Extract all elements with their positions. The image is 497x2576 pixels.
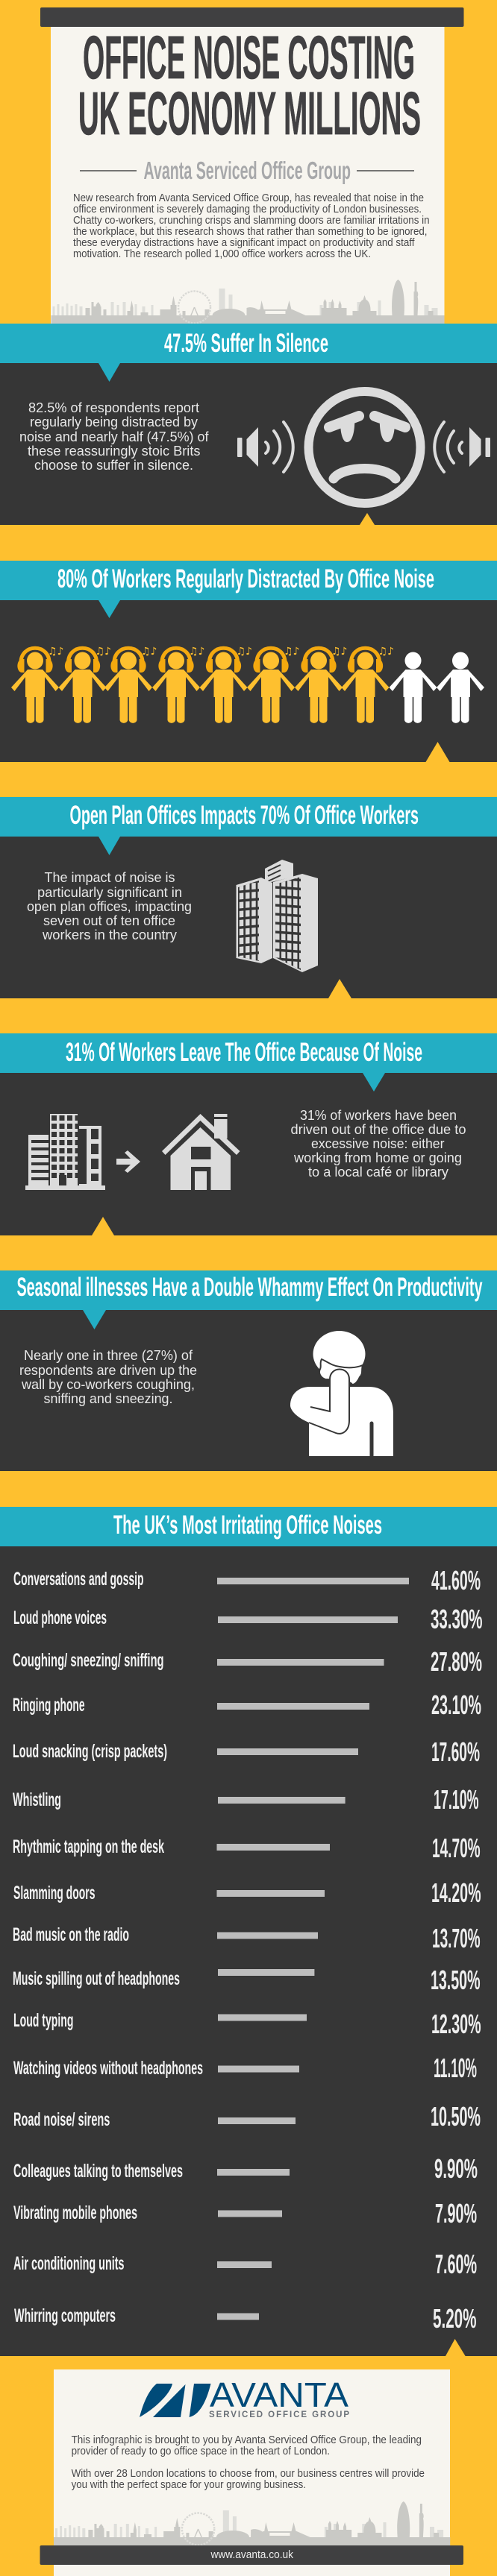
website bar: www.avanta.co.uk	[210, 2549, 294, 2561]
body text: Nearly one in three (27%) of	[24, 1347, 193, 1363]
body text: to a local café or library	[308, 1164, 449, 1180]
teal heading band	[0, 797, 497, 837]
panel: seasonal illnesses	[0, 1270, 497, 1471]
person 8 with headphones: ♫♪	[378, 646, 394, 658]
person 6 with headphones	[247, 646, 300, 723]
panel: footer	[40, 2369, 463, 2576]
icon: sad face	[309, 391, 421, 503]
panel: open plan offices	[0, 797, 497, 998]
paper sheet	[51, 27, 445, 324]
row: whirring computers: Whirring computers	[14, 2306, 116, 2326]
body text: particularly significant in	[37, 884, 182, 900]
row: loud typing: Loud typing	[13, 2011, 73, 2031]
bar chart	[13, 1565, 482, 2334]
body text	[19, 1347, 197, 1406]
row: coughing: Coughing/ sneezing/ sniffing	[13, 1651, 164, 1671]
row: whistling	[13, 1784, 479, 1815]
row: vibrating phones: Vibrating mobile phones	[13, 2203, 137, 2223]
person 1 with headphones: ♫♪	[48, 646, 64, 658]
row: conversations and gossip: Conversations and gossip	[13, 1569, 143, 1590]
person 3 with headphones: ♫♪	[141, 646, 157, 658]
teal heading band	[0, 1033, 497, 1073]
row: road noise: Road noise/ sirens	[13, 2110, 110, 2130]
logo: Avanta	[140, 2375, 349, 2419]
person 2 with headphones: ♫♪	[96, 646, 111, 658]
row: coughing	[13, 1646, 482, 1677]
row: conversations and gossip	[13, 1565, 481, 1596]
row: ringing phone: Ringing phone	[13, 1695, 84, 1716]
person 3 with headphones	[104, 646, 157, 723]
body text: excessive noise: either	[311, 1136, 445, 1151]
body text: sniffing and sneezing.	[43, 1391, 173, 1406]
intro text: these everyday distractions have a significant impact on productivity and staff	[73, 237, 415, 249]
row: whistling: Whistling	[13, 1790, 61, 1810]
icon: house	[162, 1114, 240, 1190]
icon: speaker right	[434, 422, 490, 472]
icon: office towers	[236, 860, 318, 972]
intro text	[73, 192, 430, 260]
person 6 with headphones: ♫♪	[284, 646, 300, 658]
teal heading band	[0, 324, 497, 363]
London skyline	[54, 2501, 450, 2545]
teal heading band	[0, 1270, 497, 1310]
teal heading band	[0, 1507, 497, 1546]
row: loud phone voices: Loud phone voices	[13, 1608, 107, 1628]
body text	[291, 1107, 466, 1180]
row: ringing phone	[13, 1689, 481, 1720]
body text: wall by co-workers coughing,	[21, 1376, 195, 1392]
top bar	[40, 7, 464, 27]
row: vibrating phones	[13, 2198, 477, 2229]
body text: these reassuringly stoic Brits	[28, 443, 200, 459]
footer text: provider of ready to go office space in the heart of London.	[72, 2446, 330, 2457]
yellow pointer	[360, 513, 375, 525]
panel: header	[40, 7, 464, 324]
row: music spilling: Music spilling out of headphones	[13, 1969, 180, 1989]
row: music spilling	[13, 1965, 481, 1995]
pointer	[83, 1310, 106, 1329]
row: rhythmic tapping: Rhythmic tapping on the desk	[13, 1837, 164, 1857]
body text: working from home or going	[293, 1150, 462, 1165]
London skyline	[51, 280, 445, 324]
person 1 with headphones	[11, 646, 64, 723]
row: watching videos: Watching videos without headphones	[13, 2059, 203, 2079]
icon: sneezing person	[290, 1331, 393, 1456]
icon: city buildings	[25, 1114, 105, 1190]
heading: 47.5% Suffer In Silence	[164, 329, 328, 358]
body text: workers in the country	[42, 927, 178, 942]
row: colleagues talking: Colleagues talking to themselves	[13, 2161, 183, 2182]
footer text: This infographic is brought to you by Avanta Serviced Office Group, the leading	[72, 2434, 422, 2446]
intro text: the workplace, but this research shows that rather than something to be ignored,	[73, 226, 427, 238]
yellow pointer	[328, 979, 351, 998]
row: loud snacking: Loud snacking (crisp packets)	[13, 1742, 167, 1762]
body text: regularly being distracted by	[30, 414, 199, 429]
row: loud phone voices	[13, 1604, 482, 1634]
row: watching videos	[13, 2053, 477, 2083]
row: air conditioning	[13, 2249, 477, 2279]
row: air conditioning: Air conditioning units	[13, 2254, 124, 2274]
body text: seven out of ten office	[43, 913, 175, 928]
body text: noise and nearly half (47.5%) of	[19, 429, 209, 444]
person 5 with headphones: ♫♪	[236, 646, 252, 658]
body text	[19, 400, 209, 473]
body text: 82.5% of respondents report	[28, 400, 199, 415]
row: slamming doors: Slamming doors	[13, 1883, 96, 1903]
body text	[27, 869, 192, 942]
footer text	[72, 2434, 425, 2491]
person 9	[390, 652, 437, 723]
person 8 with headphones	[342, 646, 394, 723]
yellow pointer	[425, 742, 449, 762]
body text: choose to suffer in silence.	[34, 457, 193, 473]
person 2 with headphones	[58, 646, 111, 723]
logo: Avanta: SERVICED OFFICE GROUP	[209, 2410, 349, 2419]
yellow pointer	[446, 2339, 466, 2356]
body text: The impact of noise is	[45, 869, 175, 885]
person 4 with headphones	[152, 646, 204, 723]
subtitle: Avanta Serviced Office Group	[143, 157, 351, 185]
body text: 31% of workers have been	[300, 1107, 457, 1123]
row: slamming doors	[13, 1877, 481, 1908]
teal heading band	[0, 561, 497, 600]
intro text: office environment is severely damaging the productivity of London businesses.	[73, 204, 422, 215]
website bar	[40, 2545, 463, 2565]
row: loud snacking	[13, 1736, 480, 1767]
panel: 47.5% suffer in silence	[0, 324, 497, 525]
person 7 with headphones	[295, 646, 348, 723]
logo: Avanta: AVANTA	[210, 2375, 348, 2414]
row: road noise	[13, 2101, 481, 2132]
body text: respondents are driven up the	[19, 1362, 197, 1378]
title	[78, 24, 421, 148]
paper sheet	[54, 2369, 450, 2576]
row: bad music	[13, 1923, 481, 1953]
yellow pointer	[92, 1217, 114, 1235]
person 5 with headphones	[200, 646, 252, 723]
body text: driven out of the office due to	[291, 1121, 466, 1137]
icon: arrow	[116, 1150, 140, 1173]
icon: speaker left	[237, 422, 293, 472]
pictogram: ten people	[11, 646, 484, 723]
panel: 80% of workers distracted	[0, 561, 497, 762]
row: bad music: Bad music on the radio	[13, 1925, 129, 1945]
pointer	[363, 1073, 385, 1092]
intro text: motivation. The research polled 1,000 office workers across the UK.	[73, 248, 371, 260]
row: rhythmic tapping	[13, 1833, 481, 1863]
body text: open plan offices, impacting	[27, 898, 192, 914]
intro text: New research from Avanta Serviced Office Group, has revealed that noise in the	[73, 192, 424, 204]
footer text: With over 28 London locations to choose from, our business centres will provide	[72, 2468, 425, 2480]
row: whirring computers	[14, 2303, 476, 2334]
pointer	[99, 837, 120, 855]
panel: 31% leave the office	[0, 1033, 497, 1235]
person 10	[437, 652, 484, 723]
person 7 with headphones: ♫♪	[331, 646, 348, 658]
pointer	[99, 363, 120, 382]
person 4 with headphones: ♫♪	[189, 646, 204, 658]
intro text: Chatty co-workers, crunching crisps and slamming doors are familiar irritations in	[73, 215, 430, 227]
pointer	[99, 600, 120, 618]
footer text: you with the perfect space for your growing business.	[72, 2479, 306, 2491]
panel: most irritating office noises	[0, 1507, 497, 2356]
row: loud typing	[13, 2009, 481, 2039]
row: colleagues talking	[13, 2153, 478, 2184]
